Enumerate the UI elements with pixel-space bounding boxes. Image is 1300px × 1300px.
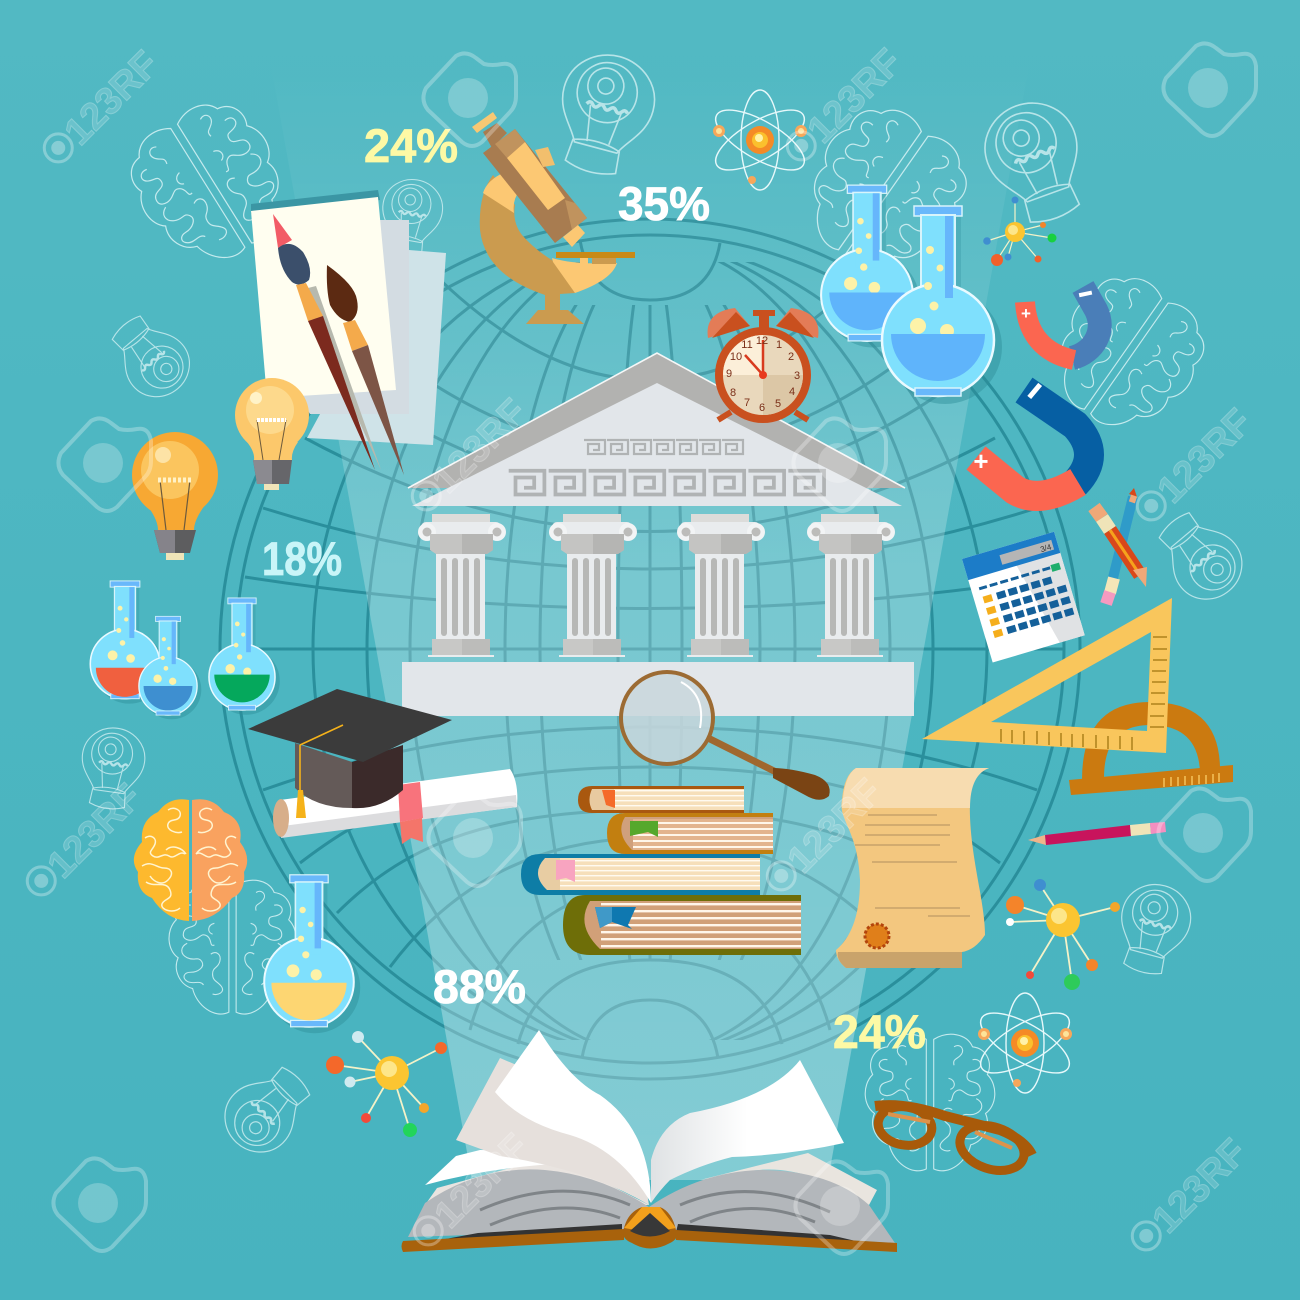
- icon: yellow flask: [264, 875, 360, 1033]
- book 3: [521, 854, 760, 895]
- icon: triangle ruler: [922, 598, 1172, 753]
- icon: paper and paint brushes: [251, 190, 446, 475]
- stat: 35%: 35%: [618, 177, 710, 230]
- icon: alarm clock: 2: [788, 351, 794, 363]
- icon: diploma scroll: [273, 769, 517, 844]
- temple: [402, 353, 914, 716]
- icon: alarm clock: 10: [730, 351, 742, 363]
- icon: glasses: [875, 1103, 1032, 1178]
- outline brains: [112, 85, 1223, 1171]
- icon: alarm clock: 4: [789, 386, 795, 398]
- icon: alarm clock: 3: [794, 370, 800, 382]
- icon: alarm clock: 1: [776, 339, 782, 351]
- icon: large magnet: [973, 383, 1089, 496]
- icon: alarm clock: 12: [756, 335, 768, 347]
- icon: alarm clock: 8: [730, 387, 736, 399]
- temple base: [402, 662, 914, 716]
- icon: atom bottom: [972, 993, 1078, 1093]
- icon: atom top: [707, 90, 813, 190]
- icon: molecule bottom left: [326, 1031, 447, 1137]
- stat: 88%: 88%: [433, 960, 526, 1013]
- icon: molecule right: [1006, 879, 1120, 990]
- icon: three left flasks: [90, 581, 280, 719]
- globe grid: [220, 219, 1080, 1079]
- icon: protractor: [1069, 702, 1233, 795]
- book 2: [607, 813, 773, 854]
- icon: small yellow bulb: [235, 378, 309, 490]
- icon: molecule small top: [983, 196, 1056, 266]
- icon: mortarboard cap: [248, 689, 452, 818]
- icon: magenta pencil: [1028, 822, 1166, 845]
- book 1: [578, 786, 744, 813]
- stat: 18%: 18%: [262, 532, 342, 585]
- icon: large orange bulb: [132, 432, 218, 560]
- icon: parchment scroll: [836, 768, 989, 968]
- icon: alarm clock: 9: [726, 368, 732, 380]
- icon: alarm clock: [708, 308, 818, 423]
- stat: 24% bottom: 24%: [833, 1005, 926, 1058]
- icon: microscope: [472, 112, 635, 324]
- outline bulbs: [75, 45, 1256, 1166]
- icon: calculator: [962, 532, 1085, 663]
- icon: magnifying glass: [621, 672, 830, 800]
- book 4: [563, 895, 801, 955]
- temple roof: [408, 353, 905, 506]
- icon: calculator: 3/4: [1039, 542, 1053, 554]
- icon: large magnet: +: [973, 446, 989, 476]
- icon: small magnet: +: [1021, 304, 1031, 323]
- icon: alarm clock: 7: [744, 397, 750, 409]
- icon: open book: [402, 1030, 897, 1252]
- temple columns: [418, 514, 895, 657]
- light beam: [270, 60, 1030, 1180]
- icon: alarm clock: 6: [759, 402, 765, 414]
- icon: alarm clock: 5: [775, 398, 781, 410]
- icon: small magnet: [1021, 287, 1100, 360]
- icon: book stack: [521, 786, 801, 955]
- icon: coloured brain: [134, 799, 247, 921]
- icon: pencils crossed: [1094, 488, 1147, 604]
- icon: two blue flasks: [821, 185, 1002, 404]
- icon: alarm clock: 11: [741, 339, 753, 351]
- stat: 24% top: 24%: [364, 119, 458, 172]
